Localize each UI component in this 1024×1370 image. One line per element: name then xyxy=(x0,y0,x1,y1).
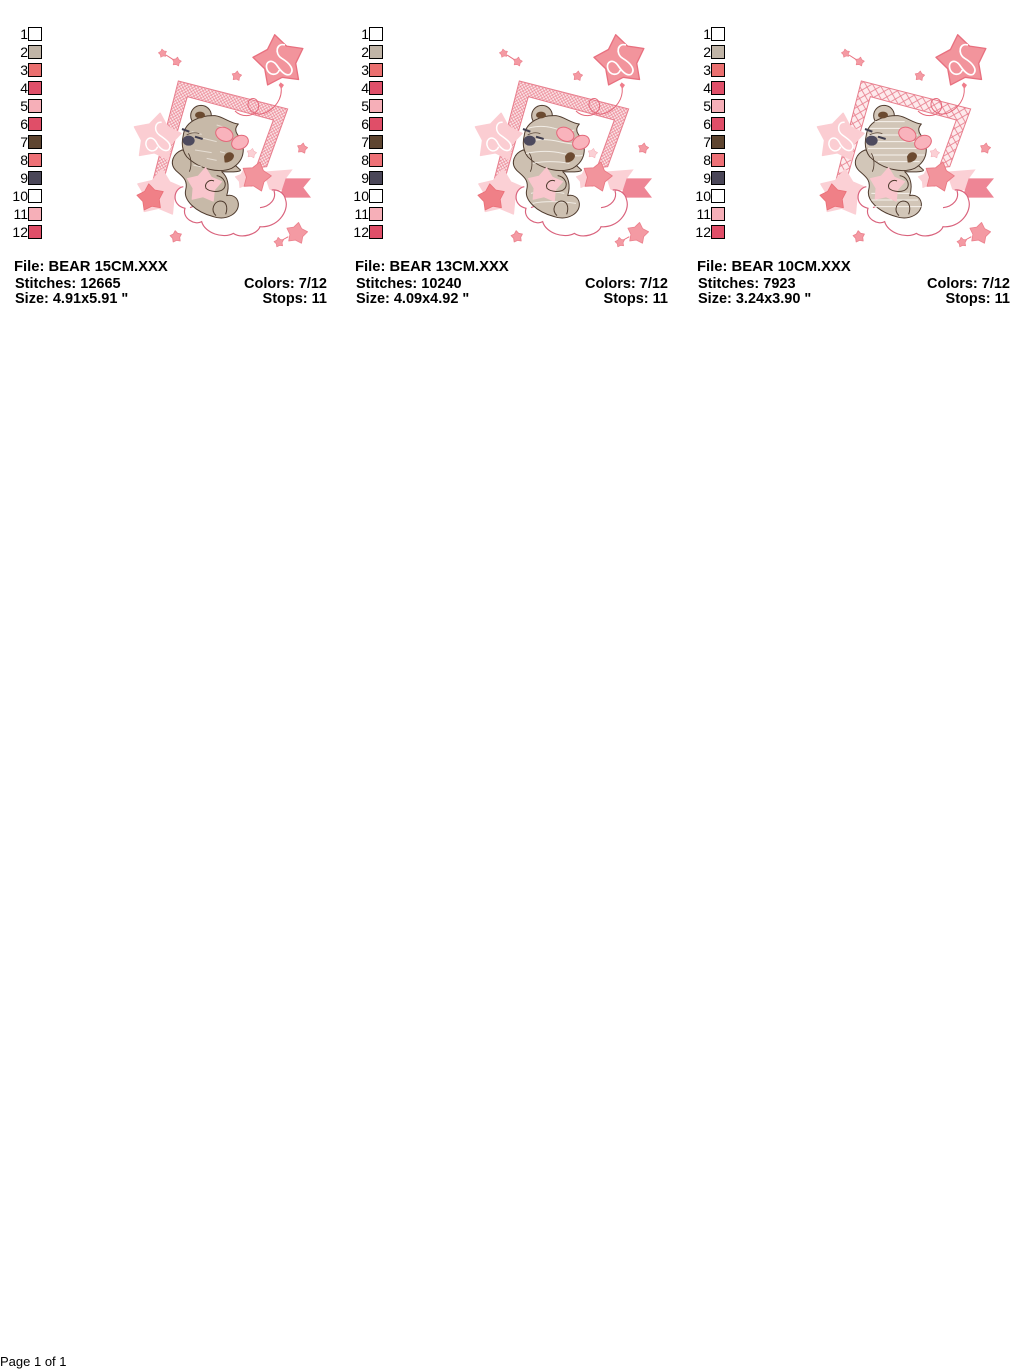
thread colour legend: 12 xyxy=(353,224,369,240)
thread colour legend: 9 xyxy=(20,170,28,186)
thread colour legend: 10 xyxy=(12,188,28,204)
file details: File: BEAR 13CM.XXX xyxy=(355,259,509,275)
thread colour legend: 7 xyxy=(703,134,711,150)
thread colour legend: 2 xyxy=(20,44,28,60)
thread colour legend: 1 xyxy=(20,26,28,42)
thread colour legend xyxy=(12,26,42,240)
thread colour legend: 12 xyxy=(12,224,28,240)
file details: Stops: 11 xyxy=(946,291,1010,307)
file details: Stops: 11 xyxy=(263,291,327,307)
thread colour legend: 4 xyxy=(703,80,711,96)
thread colour legend: 9 xyxy=(361,170,369,186)
thread colour legend: 10 xyxy=(353,188,369,204)
thread colour legend: 2 xyxy=(703,44,711,60)
file details: File: BEAR 10CM.XXX xyxy=(697,259,851,275)
thread colour legend: 5 xyxy=(361,98,369,114)
thread colour legend: 11 xyxy=(13,206,28,222)
thread colour legend xyxy=(353,26,383,240)
thread colour legend: 6 xyxy=(703,116,711,132)
panel: BEAR 15CM xyxy=(12,26,327,307)
embroidery artwork: bear on cloud xyxy=(474,34,652,248)
thread colour legend: 1 xyxy=(361,26,369,42)
thread colour legend: 5 xyxy=(20,98,28,114)
thread colour legend: 8 xyxy=(361,152,369,168)
thread colour legend: 10 xyxy=(695,188,711,204)
thread colour legend: 7 xyxy=(361,134,369,150)
file details: Size: 3.24x3.90 " xyxy=(698,291,811,307)
file details: Stitches: 7923 xyxy=(698,276,796,292)
file details: Colors: 7/12 xyxy=(585,276,668,292)
thread colour legend: 6 xyxy=(20,116,28,132)
thread colour legend: 6 xyxy=(361,116,369,132)
panel: BEAR 10CM xyxy=(695,26,1010,307)
thread colour legend: 11 xyxy=(354,206,369,222)
embroidery artwork: bear on cloud xyxy=(134,34,311,248)
panel: BEAR 13CM xyxy=(353,26,668,307)
file details: Colors: 7/12 xyxy=(244,276,327,292)
file details xyxy=(355,259,668,307)
thread colour legend: 2 xyxy=(361,44,369,60)
file details: Stitches: 12665 xyxy=(15,276,121,292)
thread colour legend: 11 xyxy=(696,206,711,222)
embroidery artwork: bear on cloud xyxy=(816,34,994,248)
thread colour legend: 9 xyxy=(703,170,711,186)
file details: Colors: 7/12 xyxy=(927,276,1010,292)
thread colour legend: 12 xyxy=(695,224,711,240)
file details: File: BEAR 15CM.XXX xyxy=(14,259,168,275)
thread colour legend xyxy=(695,26,725,240)
file details: Stitches: 10240 xyxy=(356,276,462,292)
thread colour legend: 7 xyxy=(20,134,28,150)
thread colour legend: 8 xyxy=(703,152,711,168)
thread colour legend: 5 xyxy=(703,98,711,114)
file details xyxy=(697,259,1010,307)
thread colour legend: 1 xyxy=(703,26,711,42)
thread colour legend: 4 xyxy=(20,80,28,96)
thread colour legend: 3 xyxy=(703,62,711,78)
file details: Stops: 11 xyxy=(604,291,668,307)
page footer: Page 1 of 1 xyxy=(0,1354,66,1369)
file details: Size: 4.91x5.91 " xyxy=(15,291,128,307)
thread colour legend: 3 xyxy=(20,62,28,78)
thread colour legend: 8 xyxy=(20,152,28,168)
thread colour legend: 4 xyxy=(361,80,369,96)
file details: Size: 4.09x4.92 " xyxy=(356,291,469,307)
thread colour legend: 3 xyxy=(361,62,369,78)
file details xyxy=(14,259,327,307)
